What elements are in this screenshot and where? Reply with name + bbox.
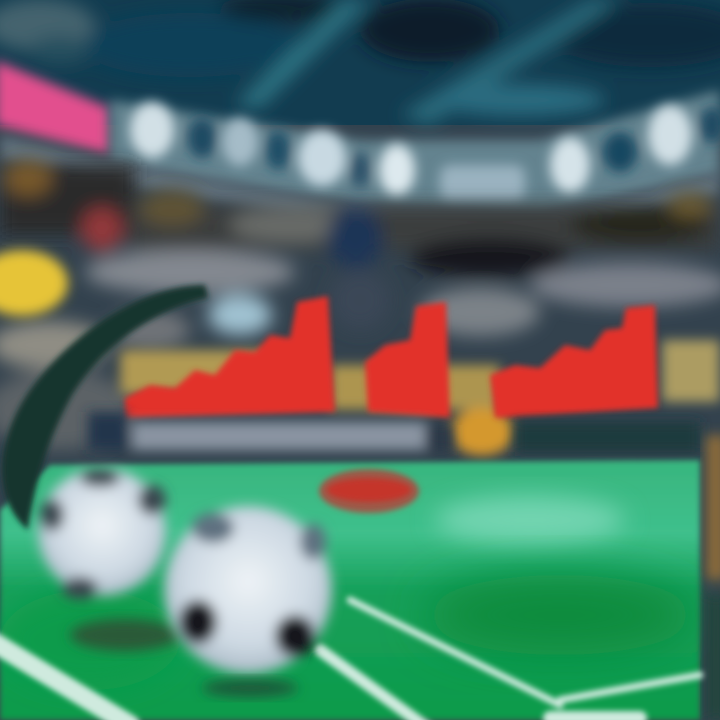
- icon: front football: [164, 506, 332, 674]
- banner: pink sign: [0, 60, 110, 155]
- shadow: under footballs: [70, 619, 180, 651]
- pitch: green field: [0, 460, 700, 720]
- icon: rear football: [38, 468, 166, 599]
- banner: white and blue panel ring: [0, 90, 720, 240]
- strip: grey advertising board: [88, 412, 700, 452]
- object: red oval on pitch: [319, 469, 419, 513]
- stands: dark crowd tiers: [0, 160, 720, 450]
- stand: yellow seating: [0, 250, 68, 316]
- shadow: front football contact: [202, 679, 298, 697]
- pitch: white lines: [0, 600, 700, 720]
- object: dark curved arc, tapered: [2, 285, 208, 530]
- right edge: dark post: [706, 435, 720, 720]
- roof: dark teal beams: [0, 0, 720, 125]
- chart-like red bars: [125, 296, 658, 418]
- banner: yellow and orange backing: [120, 340, 720, 456]
